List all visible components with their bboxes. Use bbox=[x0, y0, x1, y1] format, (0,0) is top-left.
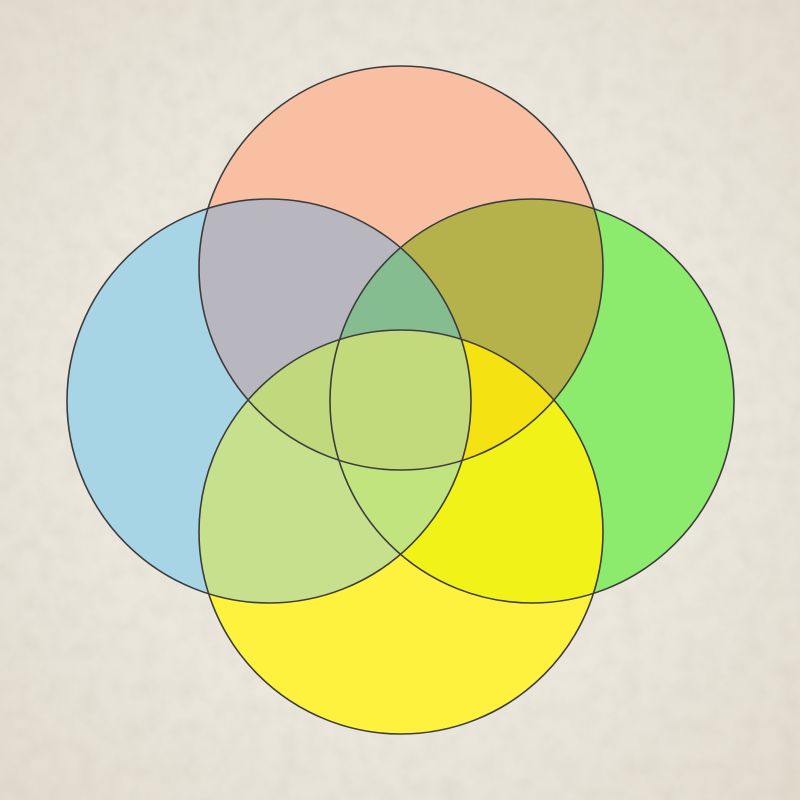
overlap: left, right and bottom bbox=[340, 461, 461, 553]
circle: top salmon bbox=[199, 66, 603, 470]
overlap: right and bottom bbox=[402, 401, 602, 602]
circle: bottom yellow bbox=[199, 330, 603, 734]
circle: left blue bbox=[67, 199, 471, 603]
circle: right green bbox=[330, 199, 734, 603]
overlap: top, left and bottom bbox=[250, 341, 338, 459]
overlap: left and bottom bbox=[200, 401, 400, 602]
circle outlines bbox=[67, 66, 734, 734]
overlap: top, right and bottom bbox=[462, 340, 552, 459]
overlap: top, left and right bbox=[340, 248, 460, 338]
four circle venn diagram bbox=[67, 66, 734, 734]
overlap: all four bbox=[331, 331, 470, 469]
overlap: top and right bbox=[402, 200, 602, 399]
overlap: top and left bbox=[200, 200, 400, 398]
